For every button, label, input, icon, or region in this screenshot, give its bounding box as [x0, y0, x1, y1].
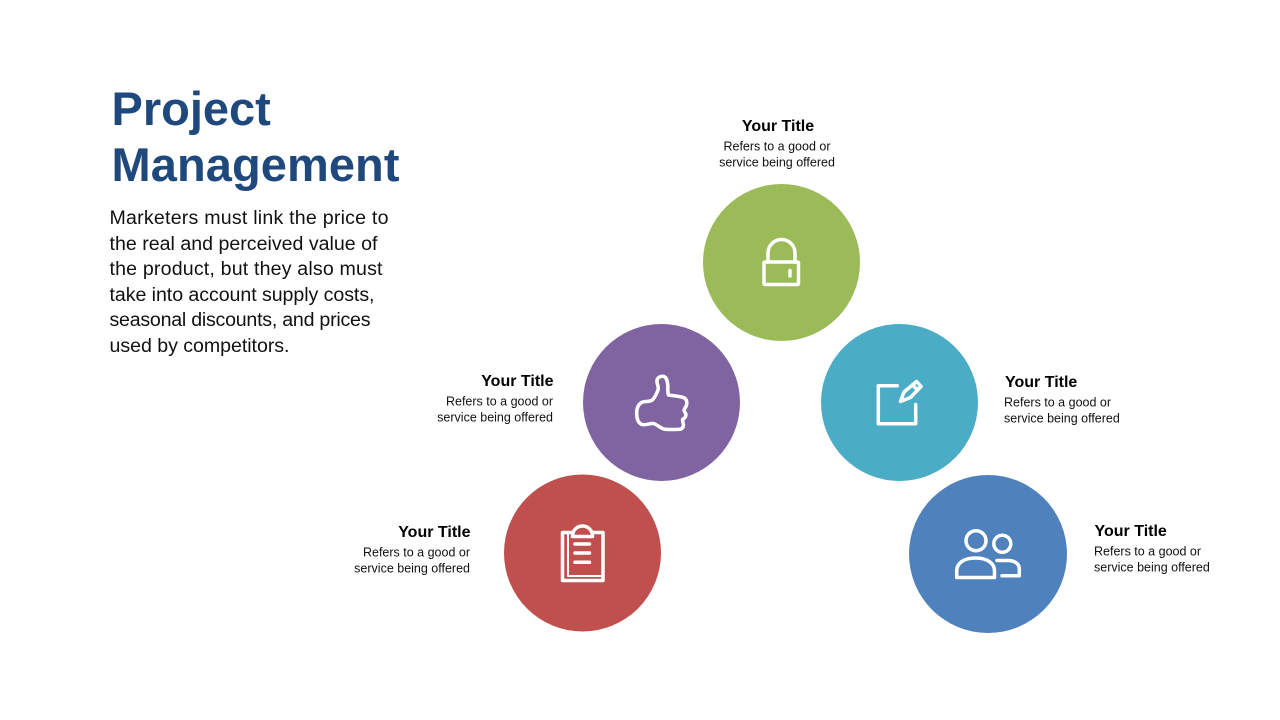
label: right upper item text: Refers to a good or — [1004, 396, 1111, 410]
label: left lower item text: service being offered — [354, 562, 470, 576]
item: purple thumbs up — [437, 324, 740, 481]
body text block: the product, but they also must — [110, 258, 383, 280]
body text block: seasonal discounts, and prices — [110, 309, 371, 331]
label: top item text: service being offered — [719, 156, 835, 170]
red circle — [504, 474, 661, 632]
blue circle — [909, 475, 1067, 633]
item: blue users — [909, 475, 1210, 633]
item: teal edit — [821, 324, 1120, 481]
icon: clipboard — [562, 526, 603, 580]
label: left upper item text: Refers to a good or — [446, 394, 553, 408]
body text block — [110, 207, 389, 357]
label: right lower item text: service being offered — [1094, 560, 1210, 574]
label: left upper item text: Your Title — [481, 373, 554, 390]
label: right lower item text — [1094, 523, 1210, 574]
body text block: take into account supply costs, — [110, 284, 374, 306]
icon: two users — [957, 531, 1019, 578]
teal circle — [821, 324, 978, 481]
body text block: the real and perceived value of — [110, 233, 378, 255]
label: left lower item text — [354, 524, 471, 576]
purple circle — [583, 324, 740, 481]
label: right upper item text: service being offered — [1004, 412, 1120, 426]
title: Management — [112, 138, 400, 191]
label: left upper item text — [437, 373, 554, 424]
label: top item text: Refers to a good or — [723, 140, 831, 154]
icon: padlock — [764, 240, 798, 284]
green circle — [703, 184, 860, 341]
label: left upper item text: service being offered — [437, 410, 553, 424]
icon: thumbs up — [637, 376, 687, 430]
label: top item text: Your Title — [742, 118, 814, 135]
label: right lower item text: Your Title — [1094, 523, 1167, 540]
label: right upper item text: Your Title — [1005, 374, 1077, 391]
item: red clipboard — [354, 474, 661, 632]
label: top item text — [719, 118, 835, 170]
icon: note with pencil — [878, 382, 921, 424]
item: green lock — [703, 118, 860, 341]
title — [112, 82, 400, 191]
body text block: Marketers must link the price to — [110, 207, 389, 229]
label: right lower item text: Refers to a good or — [1094, 544, 1201, 558]
label: left lower item text: Refers to a good or — [363, 546, 470, 560]
title: Project — [112, 82, 271, 135]
label: right upper item text — [1004, 374, 1120, 426]
label: left lower item text: Your Title — [398, 524, 471, 541]
body text block: used by competitors. — [110, 335, 290, 357]
